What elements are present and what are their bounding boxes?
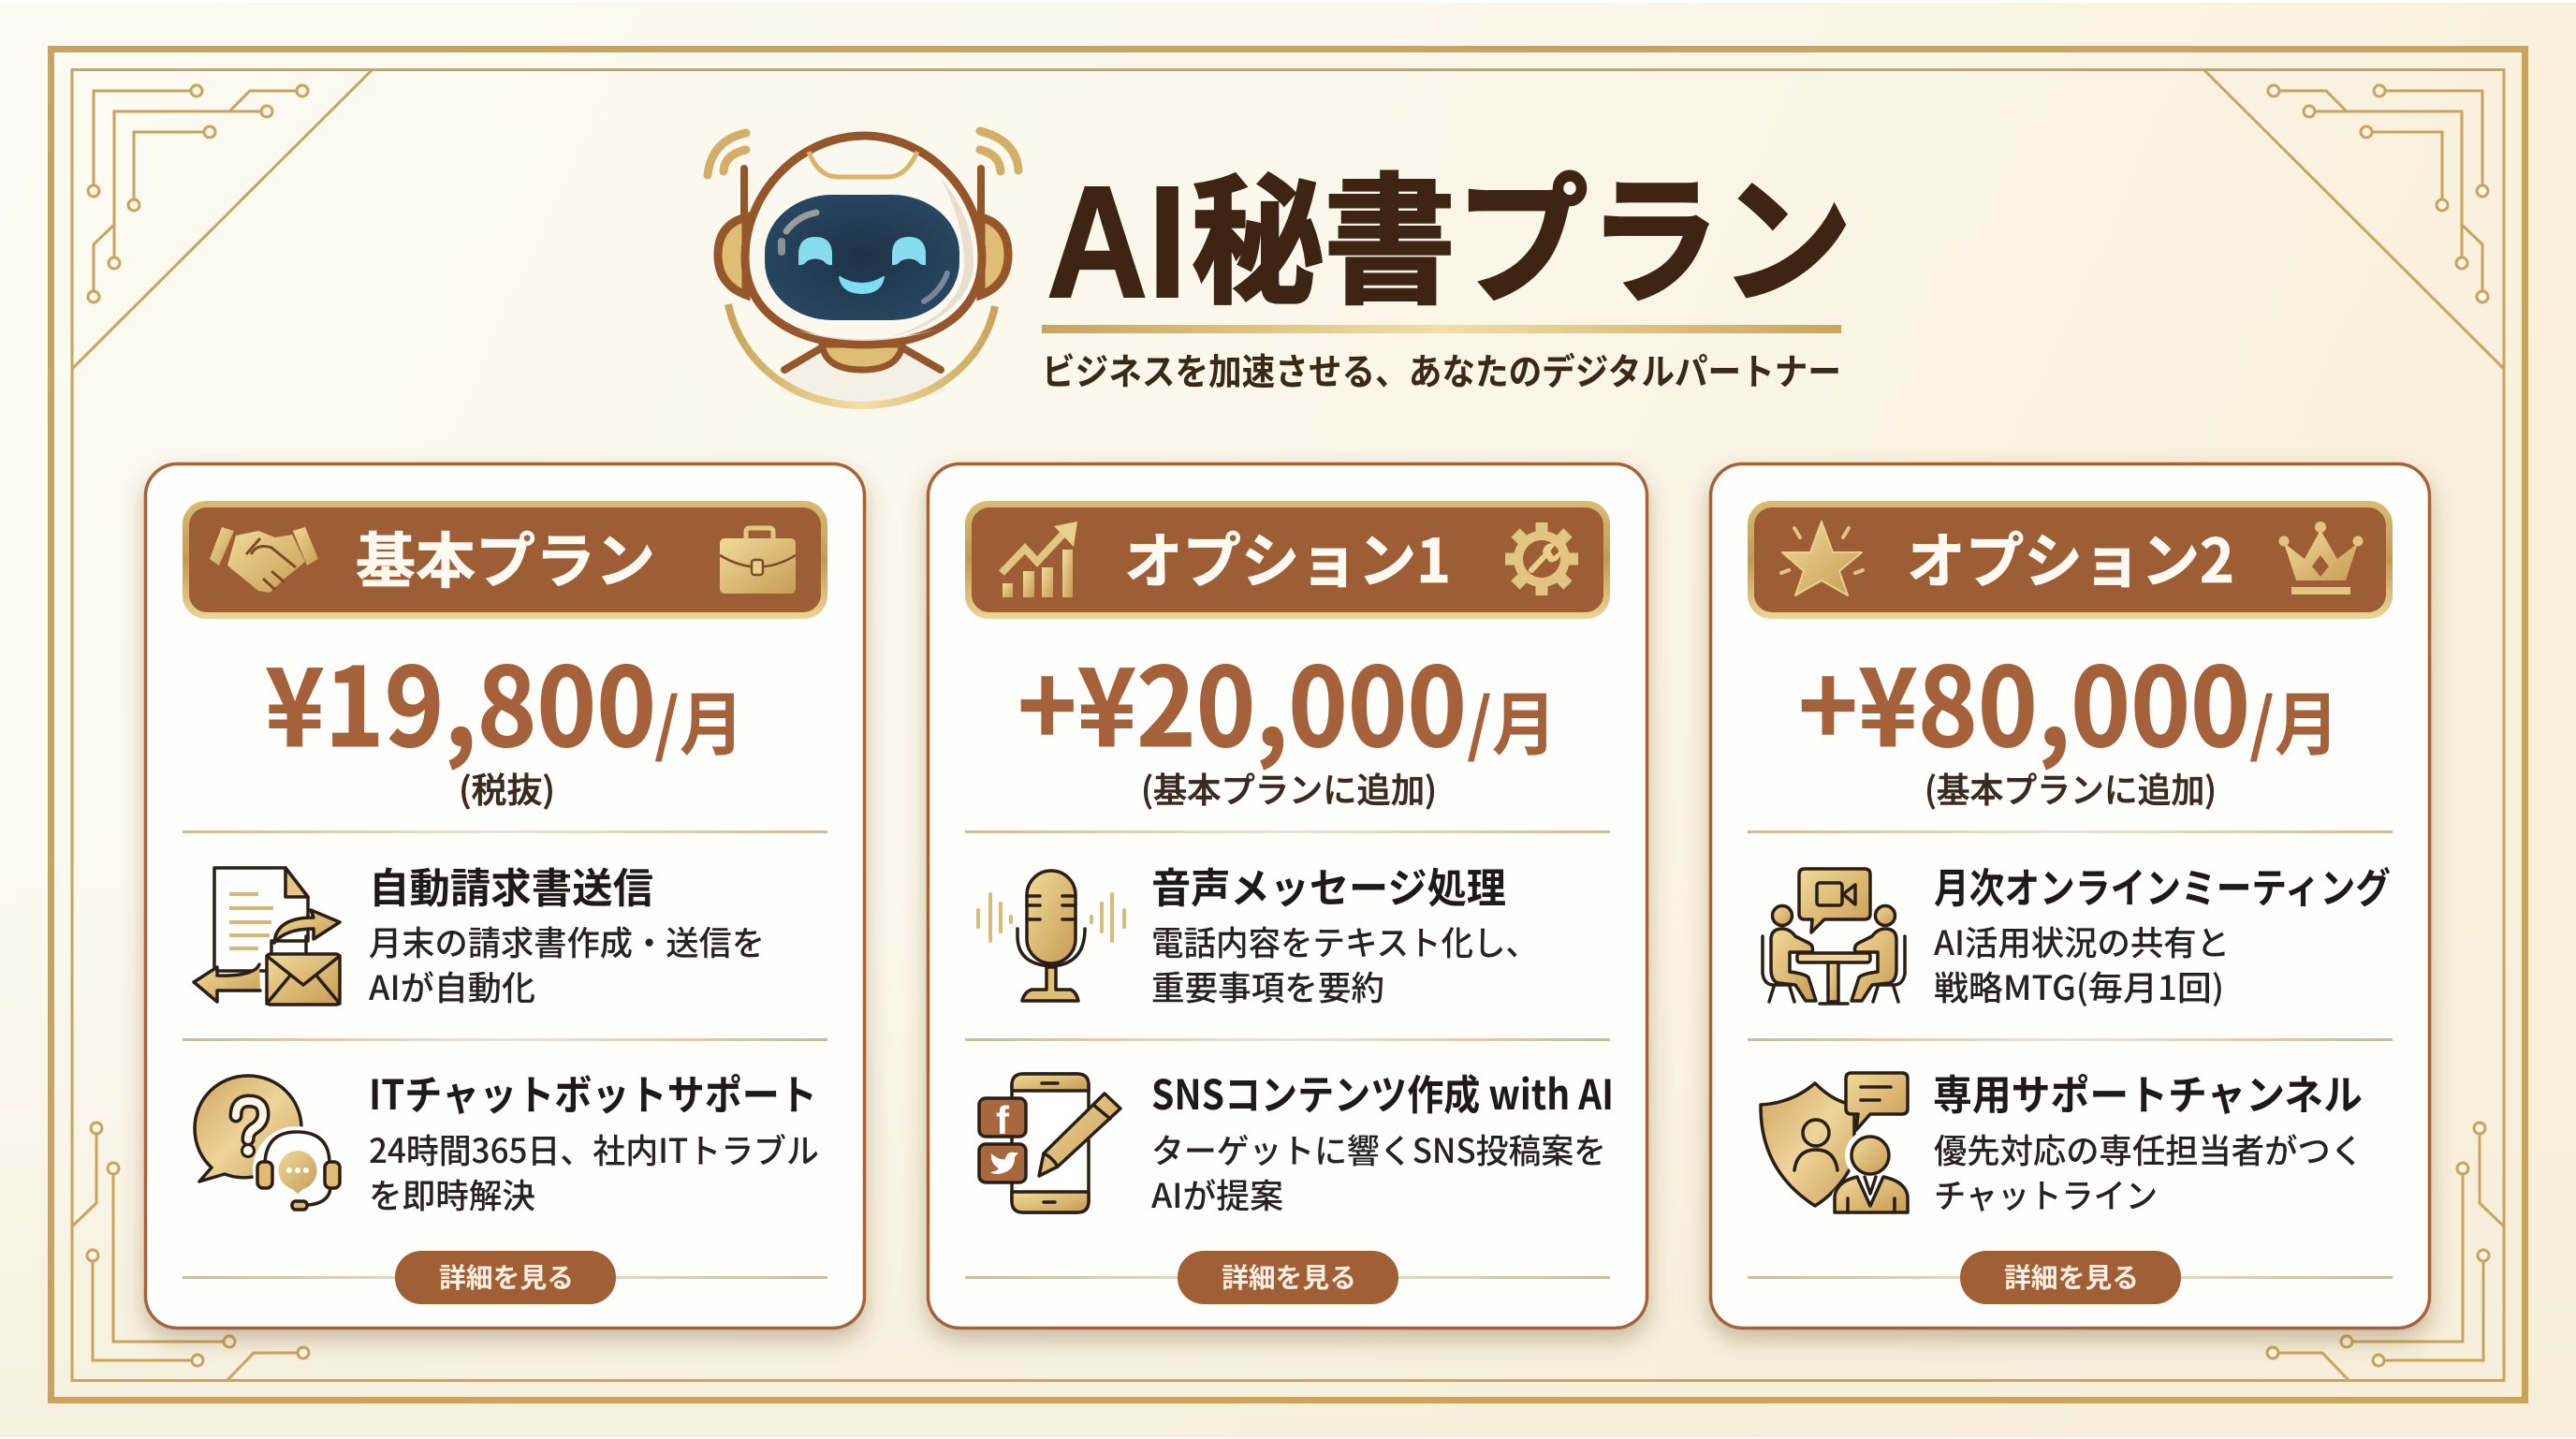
- icon: invoice and envelope: [194, 868, 340, 1005]
- price note: (基本プランに追加): [1925, 762, 2217, 813]
- feature: voice message: [978, 855, 1538, 1010]
- corner circuit: bottom right: [2267, 1123, 2504, 1380]
- icon: robot mascot: [708, 131, 1018, 405]
- icon: microphone: [978, 871, 1124, 1001]
- header band: [183, 501, 827, 619]
- price note: (基本プランに追加): [1141, 762, 1437, 813]
- icon: shield and support agent: [1761, 1073, 1911, 1217]
- title: AI: [1046, 154, 1187, 331]
- icon: gear with wrench: [1505, 522, 1578, 595]
- feature description: [1934, 917, 2230, 1010]
- icon: handshake: [210, 527, 318, 593]
- price: /月: [654, 669, 744, 770]
- feature description: を即時解決: [369, 1169, 535, 1218]
- feature: monthly meeting: [1763, 855, 2391, 1010]
- feature title: 音声メッセージ処理: [1151, 855, 1506, 915]
- feature title: 専用サポートチャンネル: [1933, 1062, 2363, 1122]
- feature description: AI活用状況の共有と: [1934, 917, 2230, 965]
- price: ¥19,800: [265, 621, 656, 778]
- icon: growth chart: [1002, 521, 1077, 597]
- feature description: [369, 1124, 819, 1218]
- panel: basic plan: [146, 464, 865, 1328]
- feature description: ターゲットに響くSNS投稿案を: [1151, 1124, 1606, 1173]
- feature: IT chatbot: [195, 1062, 819, 1218]
- panel: option 2: [1711, 464, 2430, 1328]
- price: +¥80,000: [1798, 621, 2250, 778]
- icon: phone with social and pencil: f: [996, 1098, 1010, 1142]
- title: 秘書プラン: [1192, 129, 1852, 332]
- feature description: 戦略MTG(毎月1回): [1934, 962, 2224, 1010]
- header band: [1748, 501, 2393, 619]
- header band: オプション1: [1124, 514, 1451, 600]
- feature description: 月末の請求書作成・送信を: [369, 917, 765, 965]
- icon: crown: [2278, 521, 2363, 595]
- icon: star: [1781, 521, 1863, 595]
- button: [1960, 1251, 2181, 1304]
- icon: briefcase: [720, 528, 796, 594]
- feature title: 月次オンラインミーティング: [1934, 855, 2391, 915]
- feature: dedicated support: [1761, 1062, 2364, 1218]
- feature description: 優先対応の専任担当者がつく: [1934, 1124, 2364, 1173]
- feature: invoice: [194, 855, 765, 1010]
- button: 詳細を見る: [439, 1256, 574, 1296]
- subtitle: ビジネスを加速させる、あなたのデジタルパートナー: [1042, 344, 1841, 396]
- feature title: ITチャットボットサポート: [369, 1062, 817, 1122]
- header band: 基本プラン: [356, 514, 655, 600]
- feature title: 自動請求書送信: [369, 855, 653, 915]
- title underline: [1042, 325, 1841, 333]
- price note: (税抜): [459, 762, 555, 813]
- feature description: [1151, 917, 1538, 1010]
- price: +¥20,000: [1017, 621, 1467, 778]
- feature description: 重要事項を要約: [1151, 962, 1384, 1010]
- panel: option 1: [929, 464, 1647, 1328]
- feature description: AIが提案: [1151, 1169, 1283, 1218]
- price: /月: [2249, 669, 2339, 770]
- button: 詳細を見る: [1222, 1256, 1356, 1296]
- price: /月: [1467, 669, 1557, 770]
- feature description: 電話内容をテキスト化し、: [1151, 917, 1538, 965]
- feature description: [1934, 1124, 2364, 1218]
- icon: question bubble with headset: [195, 1076, 341, 1214]
- button: 詳細を見る: [2004, 1256, 2139, 1296]
- header band: オプション2: [1907, 514, 2234, 600]
- feature title: SNSコンテンツ作成 with AI: [1151, 1062, 1614, 1122]
- feature description: AIが自動化: [369, 962, 535, 1010]
- corner circuit: bottom left: [72, 1123, 309, 1380]
- header band: [965, 501, 1610, 619]
- icon: online meeting: [1763, 869, 1905, 1004]
- feature description: 24時間365日、社内ITトラブル: [369, 1124, 819, 1173]
- corner circuit: top left: [72, 70, 372, 369]
- feature description: [1151, 1124, 1606, 1218]
- feature description: チャットライン: [1934, 1169, 2158, 1218]
- icon: phone with social and pencil: [979, 1074, 1120, 1212]
- button: [395, 1251, 616, 1304]
- button: [1178, 1251, 1398, 1304]
- feature: SNS content: [979, 1062, 1614, 1218]
- feature description: [369, 917, 765, 1010]
- corner circuit: top right: [2204, 70, 2504, 369]
